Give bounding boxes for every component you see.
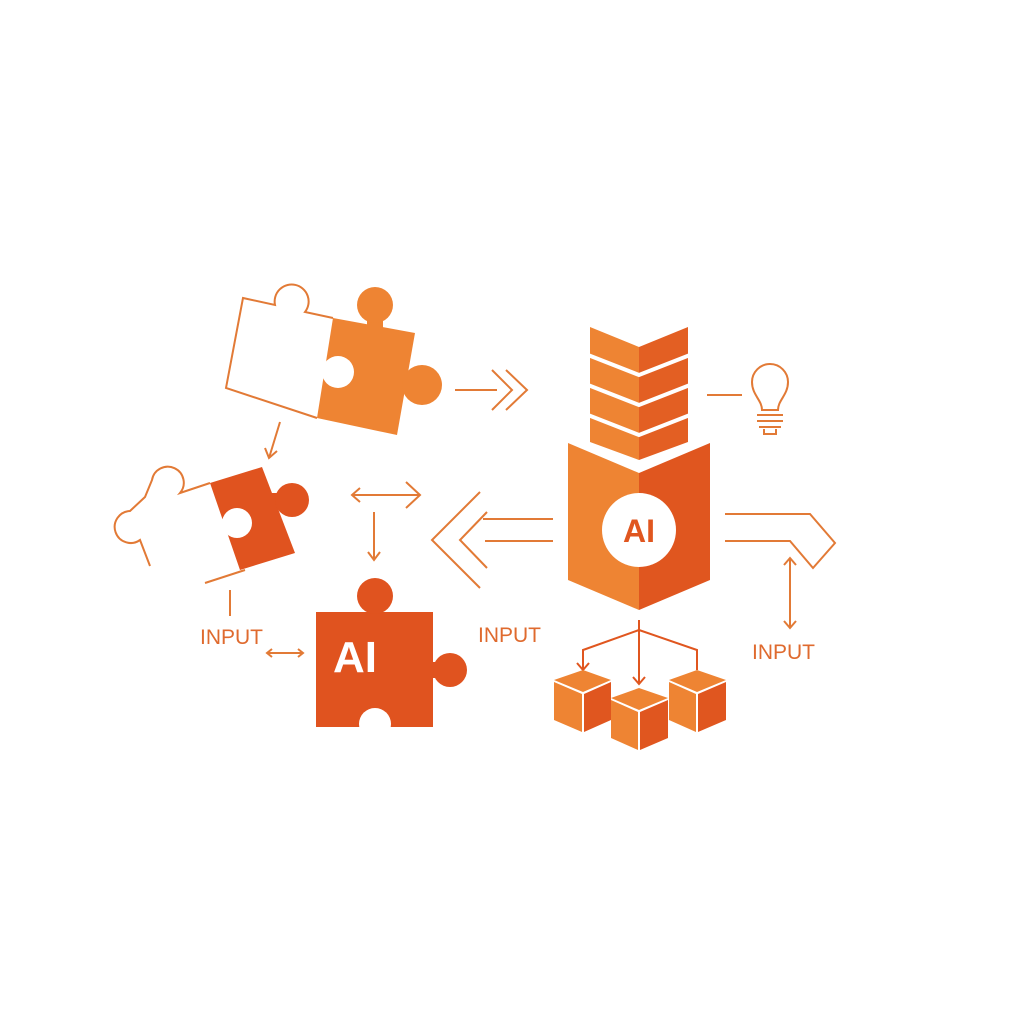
dark puzzle piece <box>210 467 309 570</box>
outline puzzle piece <box>226 284 333 418</box>
cubes <box>554 670 726 750</box>
outline squiggle piece <box>115 467 245 583</box>
AI puzzle piece: AI <box>333 633 377 682</box>
label: INPUT left: INPUT <box>200 626 263 649</box>
label: INPUT right: INPUT <box>752 641 815 664</box>
top puzzle pair <box>226 284 442 435</box>
arrows: double horizontal and down <box>352 482 420 560</box>
tree connector <box>577 620 697 684</box>
label: INPUT middle: INPUT <box>478 624 541 647</box>
arrow: down to middle piece <box>265 422 280 458</box>
arrow: right bent <box>725 514 835 628</box>
middle puzzle pair <box>115 467 309 583</box>
arrow: right double chevron <box>455 370 527 410</box>
orange puzzle piece <box>317 287 442 435</box>
connector line and small arrow <box>230 590 303 657</box>
AI shield: AI <box>623 513 655 549</box>
icon: light bulb <box>707 364 788 434</box>
AI shield <box>568 443 710 610</box>
arrow: big left chevrons <box>432 492 553 588</box>
chevron stack <box>588 327 690 460</box>
AI puzzle piece <box>316 578 467 740</box>
